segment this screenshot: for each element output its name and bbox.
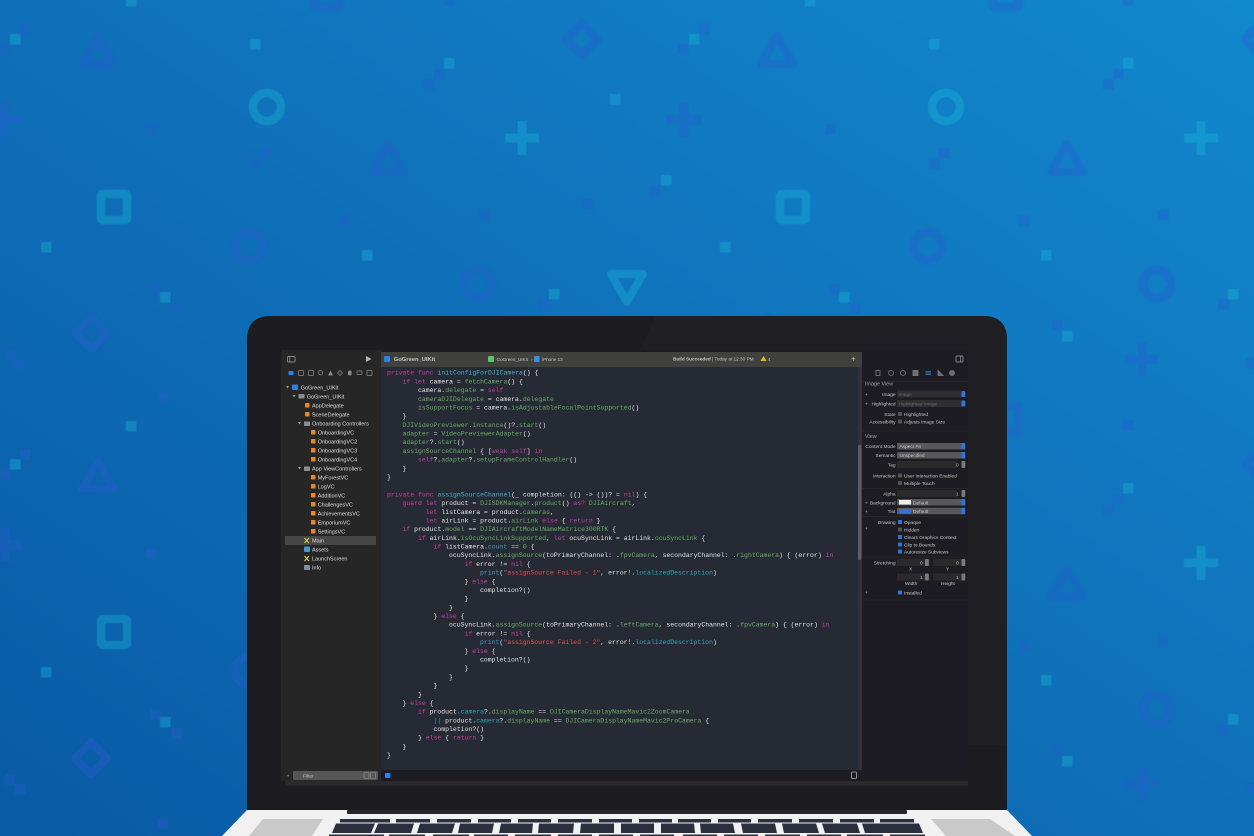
file tree labels: GoGreen_UIKit — [307, 394, 345, 400]
navigator sidebar — [281, 350, 381, 781]
file tree labels: OnboardingVC2 — [318, 440, 357, 446]
file tree labels: SettingsVC — [318, 530, 345, 536]
section: View: Installed — [904, 590, 922, 596]
editor toolbar: GoGreen_UIKit — [496, 357, 529, 362]
section: View: Alpha — [883, 491, 896, 497]
right palm pad — [931, 819, 1015, 836]
file tree icons — [286, 384, 316, 570]
editor scrollbar — [858, 367, 862, 770]
code editor: } — [449, 674, 453, 681]
warning icon — [760, 356, 766, 361]
section: View: Stretching — [874, 560, 896, 566]
inspector header icon — [956, 356, 963, 362]
file tree labels: AdditionVC — [318, 494, 345, 500]
section: View: Hidden — [904, 527, 920, 533]
section: View: Tag — [888, 462, 896, 468]
section: View: Background — [870, 500, 896, 506]
code editor: camera.delegate = self — [418, 387, 504, 394]
file tree labels: EmporiumVC — [318, 520, 350, 526]
filter field: + — [287, 774, 290, 780]
section: View: User Interaction Enabled — [904, 473, 957, 479]
section: Image View: State — [884, 412, 896, 418]
section: View: Height — [941, 581, 956, 587]
code editor: DJIVideoPreviewer.instance()?.start() — [402, 422, 546, 429]
file tree labels: Onboarding Controllers — [312, 422, 369, 428]
section: Image View: + — [865, 402, 868, 408]
code editor: completion?() — [434, 726, 484, 733]
inspector panel — [281, 350, 968, 786]
section: Image View: Image — [882, 392, 896, 398]
section: View: Autoresize Subviews — [904, 549, 949, 555]
file tree labels: OnboardingVC3 — [318, 448, 357, 454]
editor toolbar: 4 — [768, 357, 771, 362]
code editor: || product.camera?.displayName == DJICameraDisplayNameMavic2ProCamera { — [434, 717, 709, 724]
code editor: if listCamera.count == 0 { — [434, 544, 535, 550]
section: Image View: Highlighted — [871, 401, 896, 407]
section: View: Default — [913, 509, 929, 515]
section: Image View: + — [865, 393, 868, 398]
section: View: 1 — [956, 575, 959, 581]
code editor: if product.model == DJIAircraftModelNameMatrice300RTK { — [402, 526, 616, 533]
file tree labels: Main — [312, 538, 324, 544]
section: View: Clip to Bounds — [904, 542, 936, 548]
hinge notch — [347, 810, 907, 814]
inspector tab icons — [876, 370, 954, 376]
code editor: assignSourceChannel { [weak self] in — [402, 448, 542, 455]
file tree labels: AchievementsVC — [318, 512, 360, 518]
editor toolbar: + — [851, 354, 856, 364]
code editor: isSupportFocus = camera.isAdjustableFocalPointSupported() — [418, 404, 639, 412]
section: View: View — [865, 434, 877, 440]
screen: Xcode window — [281, 350, 968, 786]
code editor: } else { — [434, 613, 465, 620]
laptop lid bezel — [247, 316, 1007, 810]
code editor: } else { — [402, 700, 434, 707]
section: View: 0 — [920, 560, 923, 566]
filter field: Filter — [303, 774, 314, 780]
code editor: } — [418, 691, 422, 698]
code editor: private func initConfigForDJICamera() { — [387, 370, 539, 377]
code editor: guard let product = DJISDKManager.product() as? DJIAircraft, — [402, 500, 635, 507]
code editor: if error != nil { — [464, 561, 531, 568]
project icon — [384, 356, 390, 362]
code editor: } — [402, 465, 406, 472]
code editor: } — [402, 743, 406, 750]
code editor: completion?() — [480, 587, 530, 594]
section: View: 1 — [920, 575, 923, 581]
file tree labels: ChallengesVC — [318, 502, 353, 508]
section: Image View: Accessibility — [869, 419, 896, 425]
code editor: ocuSyncLink.assignSource(toPrimaryChannel: .fpvCamera, secondaryChannel: .rightCamera) { (error) in — [449, 552, 833, 559]
build status: Build Succeeded | Today at 12:30 PM — [673, 356, 754, 362]
lid reflection — [640, 316, 1007, 745]
code editor: private func assignSourceChannel(_ completion: (() -> ())? = nil) { — [387, 491, 647, 498]
section: View: 0 — [956, 462, 959, 468]
editor toolbar: iPhone 13 — [542, 357, 563, 362]
file tree labels: GoGreen_UIKit — [301, 385, 339, 391]
file tree labels: AppDelegate — [312, 403, 344, 409]
editor toolbar — [381, 352, 862, 367]
file tree labels: SceneDelegate — [312, 412, 350, 418]
editor toolbar: › — [531, 357, 533, 362]
code editor: cameraDJIDelegate = camera.delegate — [418, 396, 554, 403]
code editor: adapter?.start() — [402, 439, 465, 446]
code editor: if airLink.isOcuSyncLinkSupported, let ocuSyncLink = airLink.ocuSyncLink { — [418, 535, 705, 542]
file tree labels: MyForestVC — [318, 476, 348, 482]
filter field — [287, 771, 378, 780]
section: View: Content Mode — [865, 444, 896, 450]
section: View: Opaque — [904, 520, 921, 526]
section: View: Clears Graphics Context — [904, 535, 957, 541]
file tree labels: OnboardingVC4 — [318, 458, 357, 464]
file tree labels: LaunchScreen — [312, 556, 347, 562]
code editor: if product.camera?.displayName == DJICameraDisplayNameMavic2ZoomCamera — [418, 709, 690, 716]
section: View: + — [865, 591, 868, 596]
section: View: Y — [946, 566, 950, 572]
section: View: Unspecified — [900, 453, 925, 459]
laptop — [222, 316, 1032, 836]
navigator tab icons — [288, 370, 372, 376]
section: View: Drawing — [878, 520, 896, 526]
section: Image View: Adjusts Image Size — [904, 419, 945, 425]
section: View: Aspect Fit — [900, 444, 921, 450]
code editor: adapter = VideoPreviewerAdapter() — [402, 430, 531, 438]
section: Image View: Highlighted — [904, 412, 928, 418]
code editor: print("assignSource Failed - 1", error!.localizedDescription) — [480, 570, 717, 577]
section: View: + — [865, 527, 868, 532]
code editor: } — [449, 604, 453, 611]
left palm pad — [249, 819, 323, 836]
code editor: } else { return } — [418, 735, 484, 742]
code editor: ocuSyncLink.assignSource(toPrimaryChannel: .leftCamera, secondaryChannel: .fpvCamera) { (error) in — [449, 622, 830, 629]
file tree labels: OnboardingVC — [318, 430, 354, 436]
section: View: Semantic — [876, 453, 896, 459]
file tree labels: App ViewControllers — [312, 466, 362, 472]
code editor: } — [387, 474, 391, 481]
code editor: print("assignSource Failed - 2", error!.localizedDescription) — [480, 639, 717, 646]
code editor: } — [402, 413, 406, 420]
code editor: } else { — [464, 648, 496, 655]
file tree labels: Info — [312, 566, 321, 572]
code editor: let airLink = product.airLink else { return } — [426, 518, 601, 524]
section: View: Width — [905, 581, 918, 587]
section: View: 1 — [956, 491, 959, 497]
code editor: let listCamera = product.cameras, — [426, 509, 554, 516]
code editor: if let camera = fetchCamera() { — [402, 378, 523, 385]
section: View: X — [909, 566, 913, 572]
keyboard — [329, 819, 925, 836]
code editor: if error != nil { — [464, 630, 531, 637]
section: View: Multiple Touch — [904, 481, 935, 487]
selected row — [285, 536, 376, 545]
code editor: } — [387, 752, 391, 759]
section: View — [865, 434, 965, 596]
section: Image View: Highlighted Image — [898, 401, 937, 407]
section: Image View: Image — [898, 392, 912, 398]
sidebar header icons — [288, 356, 372, 362]
bottom status bar — [281, 770, 968, 786]
section: View: + — [865, 501, 868, 506]
file tree labels: Assets — [312, 548, 329, 554]
section: View: 0 — [956, 560, 959, 566]
laptop base — [222, 810, 1032, 836]
section: Image View — [865, 382, 965, 425]
code editor: } — [464, 596, 468, 603]
section: Image View: Image View — [865, 382, 893, 388]
editor toolbar: GoGreen_UIKit — [394, 357, 435, 363]
code editor: self?.adapter?.setupFrameControlHandler() — [418, 457, 577, 464]
device icon — [852, 772, 856, 778]
file tree labels — [301, 385, 369, 572]
device icon — [534, 356, 540, 362]
file tree labels: LogVC — [318, 484, 335, 490]
code editor: } — [434, 683, 438, 690]
section: View: Interaction — [873, 473, 896, 479]
section: View: Tint — [888, 509, 896, 515]
code editor — [381, 367, 858, 770]
code editor: } else { — [464, 578, 496, 585]
code editor: } — [464, 665, 468, 672]
scheme icon — [488, 356, 494, 362]
code editor: completion?() — [480, 656, 530, 664]
debug indicator — [385, 773, 390, 778]
section: View: + — [865, 510, 868, 515]
section: View: Default — [913, 500, 929, 506]
